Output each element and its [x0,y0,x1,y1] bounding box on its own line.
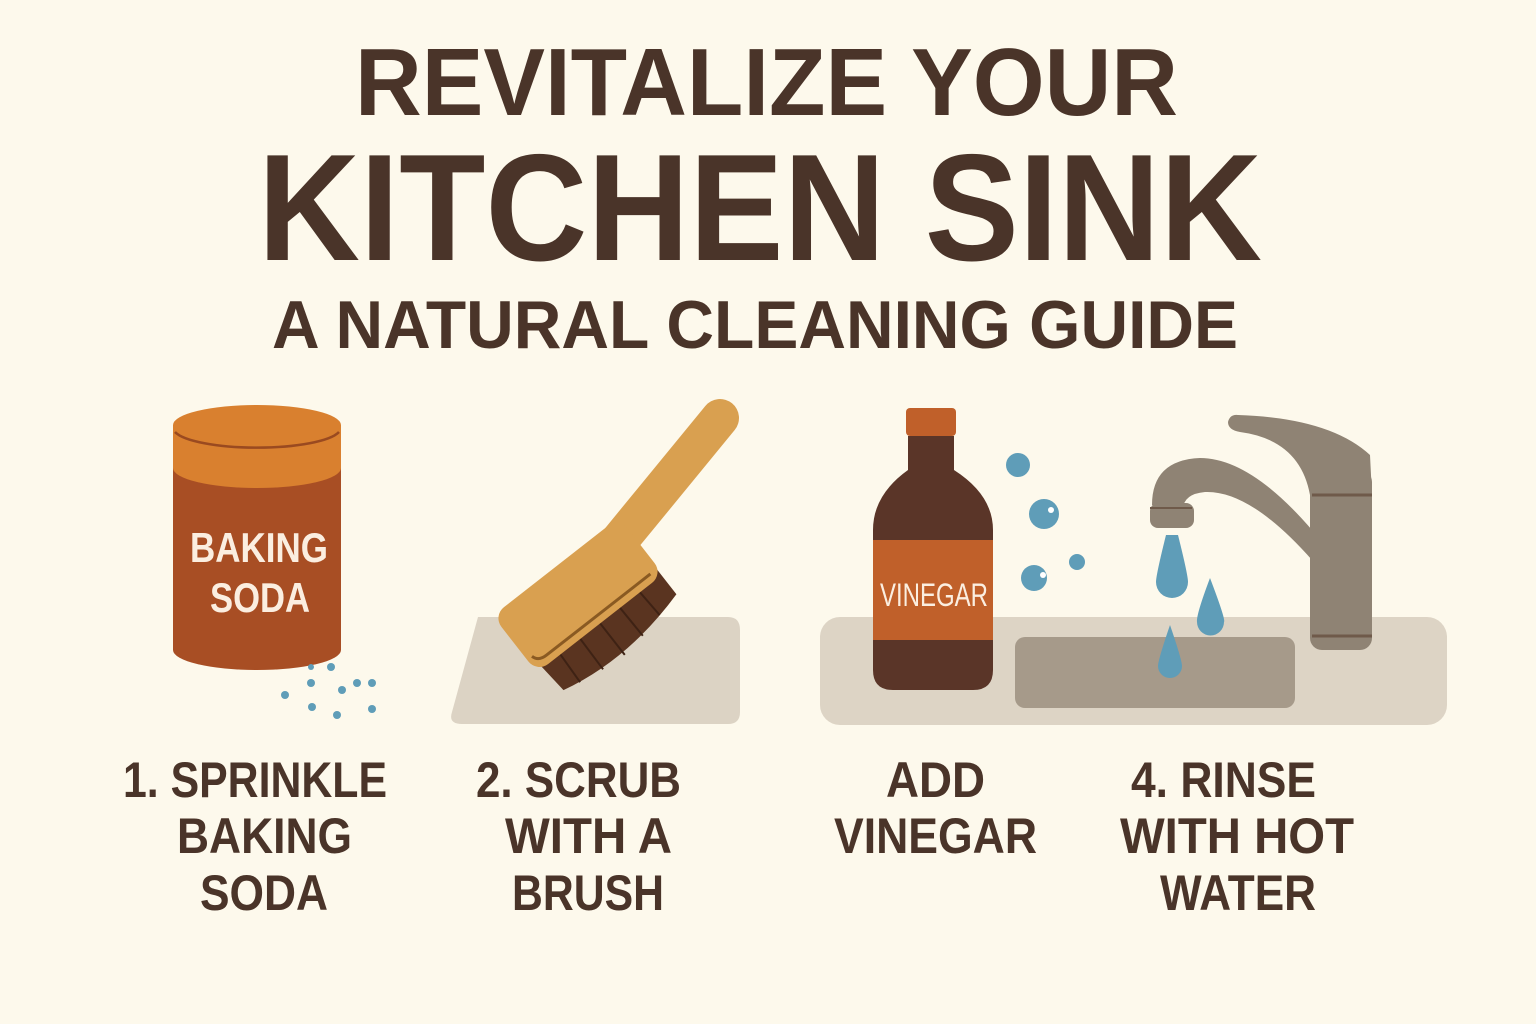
label: step 3: ADD [886,752,985,808]
icon: vinegar bottle: VINEGAR [880,577,988,613]
icon: bubbles [1006,453,1085,591]
title: A NATURAL CLEANING GUIDE [272,287,1238,363]
label: step 1 [123,752,387,921]
icon: baking soda can [173,405,341,670]
label: step 1: SODA [200,865,328,921]
label: step 4 [1120,752,1354,921]
label: step 4: WATER [1160,865,1316,921]
title [258,29,1262,363]
label: step 3 [834,752,1037,864]
title: REVITALIZE YOUR [355,29,1178,136]
icon: scrub brush [493,418,720,704]
icon: faucet [1150,415,1372,650]
counter: sink [820,617,1447,725]
label: step 2 [476,752,681,921]
icon: baking soda sprinkles [281,663,376,719]
label: step 2: 2. SCRUB [476,752,681,808]
counter: brush surface [451,617,740,724]
icon: baking soda can: SODA [210,574,310,621]
icon: baking soda can: BAKING [190,524,328,571]
label: step 4: WITH HOT [1120,808,1354,864]
label: step 1: BAKING [177,808,352,864]
label: step 2: WITH A [505,808,672,864]
label: step 3: VINEGAR [834,808,1037,864]
icon: vinegar bottle [873,408,993,690]
label: step 4: 4. RINSE [1131,752,1316,808]
label: step 1: 1. SPRINKLE [123,752,387,808]
icon: water drops [1156,535,1224,678]
title: KITCHEN SINK [258,123,1262,293]
label: step 2: BRUSH [512,865,664,921]
